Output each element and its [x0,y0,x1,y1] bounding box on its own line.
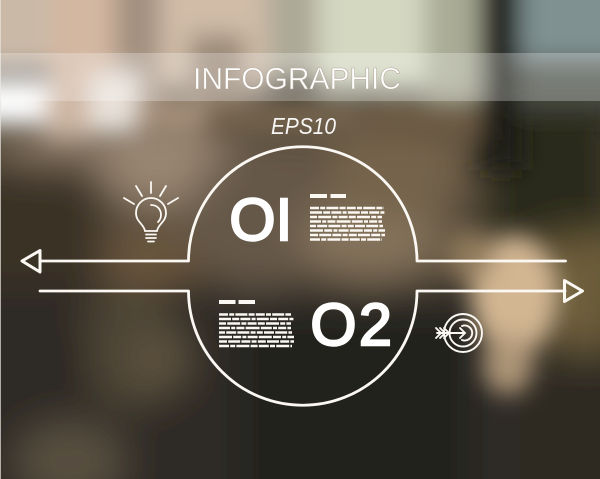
icon: target with arrow [436,314,482,352]
title: INFOGRAPHIC [193,61,401,96]
number 02 [310,292,392,358]
lower arch with right arrow [40,280,582,405]
upper arch with left arrow [22,147,566,272]
text block 02 placeholder [219,302,294,346]
icon: light bulb [124,182,178,242]
number 02: 2 [359,292,392,358]
number 01: I [276,187,292,253]
text block 01 placeholder [310,196,385,240]
number 02: O [310,292,356,358]
subtitle: EPS10 [271,113,336,139]
title band [0,53,600,101]
number 01: O [230,187,275,253]
